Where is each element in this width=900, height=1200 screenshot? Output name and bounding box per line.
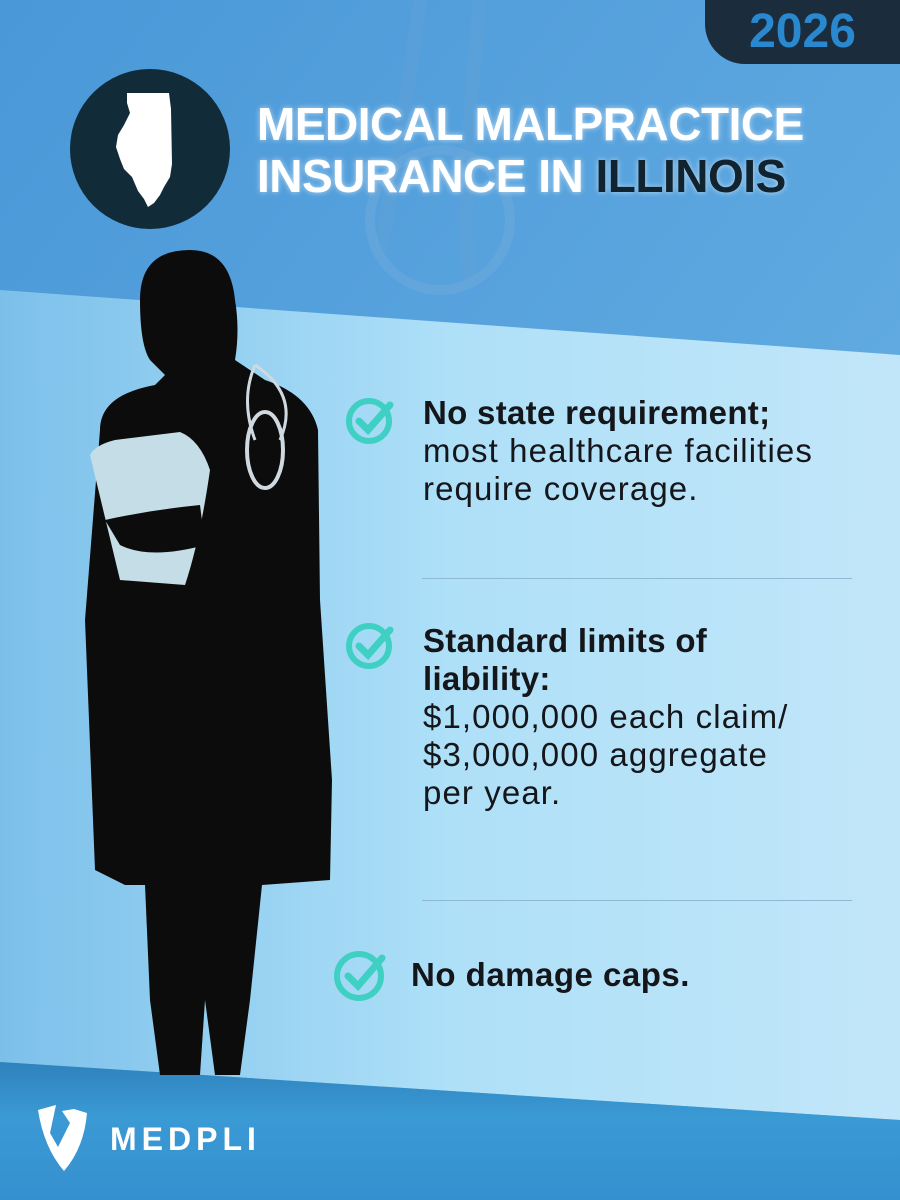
item 2: Standard limits of bbox=[423, 622, 707, 659]
item 2 bbox=[346, 622, 788, 811]
item 1: most healthcare facilities bbox=[423, 432, 813, 469]
item 3: No damage caps. bbox=[411, 956, 690, 993]
item 1: require coverage. bbox=[423, 470, 699, 507]
year badge: 2026 bbox=[749, 5, 856, 58]
item 2: $1,000,000 each claim/ bbox=[423, 698, 788, 735]
icon: check bbox=[346, 398, 394, 444]
item 2: per year. bbox=[423, 774, 561, 811]
item 3 bbox=[334, 951, 690, 1001]
item 2: liability: bbox=[423, 660, 551, 697]
item 2: $3,000,000 aggregate bbox=[423, 736, 768, 773]
item 1 bbox=[346, 394, 813, 507]
logo bbox=[38, 1105, 261, 1171]
item 1: No state requirement; bbox=[423, 394, 770, 431]
logo: MEDPLI bbox=[110, 1121, 261, 1157]
year badge bbox=[705, 0, 900, 64]
title: MEDICAL MALPRACTICE bbox=[257, 98, 804, 150]
icon: check bbox=[334, 951, 386, 1001]
title: INSURANCE IN ILLINOIS bbox=[257, 150, 786, 202]
icon: illinois circle bbox=[70, 69, 230, 229]
icon: check bbox=[346, 623, 394, 669]
title bbox=[256, 98, 806, 202]
